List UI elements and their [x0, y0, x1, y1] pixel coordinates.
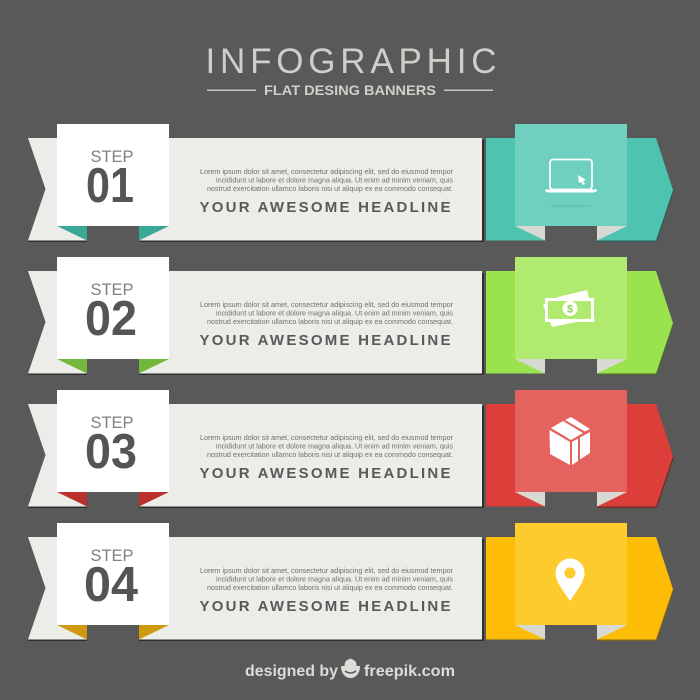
body text: nostrud exercitation ullamco laboris nisi ut aliquip ex ea commodo consequat.	[207, 184, 453, 193]
left fold tabs	[57, 226, 169, 240]
body text: Lorem ipsum dolor sit amet, consectetur adipiscing elit, sed do eiusmod tempor	[200, 300, 454, 309]
step card	[57, 257, 169, 359]
step number: 04	[84, 558, 138, 612]
body text: Lorem ipsum dolor sit amet, consectetur adipiscing elit, sed do eiusmod tempor	[200, 433, 454, 442]
body text	[200, 433, 454, 459]
body text: Lorem ipsum dolor sit amet, consectetur adipiscing elit, sed do eiusmod tempor	[200, 566, 454, 575]
right fold tabs	[515, 492, 627, 506]
panel: step 1	[28, 124, 674, 243]
footer credit: designed by	[245, 663, 338, 680]
icon: freepik mascot	[341, 658, 360, 678]
icon: banknotes: $	[567, 304, 573, 316]
icon: map pin	[556, 558, 584, 601]
right ribbon	[486, 537, 674, 642]
subtitle: FLAT DESING BANNERS	[264, 82, 436, 98]
icon card	[515, 257, 627, 359]
step label: STEP	[90, 148, 134, 166]
body text	[200, 167, 454, 193]
body text: nostrud exercitation ullamco laboris nisi ut aliquip ex ea commodo consequat.	[207, 317, 453, 326]
body text: incididunt ut labore et dolore magna aliqua. Ut enim ad minim veniam, quis	[216, 176, 453, 184]
icon card	[515, 390, 627, 492]
icon: banknotes	[543, 290, 595, 327]
body text: Lorem ipsum dolor sit amet, consectetur adipiscing elit, sed do eiusmod tempor	[200, 167, 454, 176]
headline: YOUR AWESOME HEADLINE	[200, 332, 450, 349]
body text	[200, 300, 454, 326]
step card	[57, 523, 169, 625]
body text: incididunt ut labore et dolore magna aliqua. Ut enim ad minim veniam, quis	[216, 574, 453, 584]
step number: 01	[86, 159, 134, 213]
right fold tabs	[515, 359, 627, 374]
headline: YOUR AWESOME HEADLINE	[200, 465, 450, 482]
step label: STEP	[90, 281, 134, 299]
panel: step 4	[28, 523, 674, 642]
icon card	[515, 124, 627, 226]
right fold tabs	[515, 226, 627, 240]
left fold tabs	[57, 492, 169, 506]
right ribbon	[486, 404, 674, 509]
step card	[57, 390, 169, 492]
step label: STEP	[90, 414, 134, 432]
step label: STEP	[90, 547, 134, 565]
right ribbon	[486, 271, 674, 376]
body text: incididunt ut labore et dolore magna aliqua. Ut enim ad minim veniam, quis	[216, 442, 453, 450]
left ribbon	[28, 537, 484, 642]
step number: 03	[85, 425, 137, 479]
footer credit	[245, 658, 455, 680]
left ribbon	[28, 404, 484, 509]
headline: YOUR AWESOME HEADLINE	[200, 598, 450, 615]
left ribbon	[28, 138, 484, 243]
left ribbon	[28, 271, 484, 376]
step number: 02	[85, 292, 137, 346]
body text: nostrud exercitation ullamco laboris nisi ut aliquip ex ea commodo consequat.	[207, 450, 453, 459]
body text: incididunt ut labore et dolore magna aliqua. Ut enim ad minim veniam, quis	[216, 308, 453, 318]
icon: laptop	[545, 160, 597, 208]
body text	[200, 566, 454, 592]
headline: YOUR AWESOME HEADLINE	[200, 199, 450, 216]
right fold tabs	[515, 625, 627, 640]
body text: nostrud exercitation ullamco laboris nisi ut aliquip ex ea commodo consequat.	[207, 583, 453, 592]
panel: step 3	[28, 390, 674, 509]
left fold tabs	[57, 625, 169, 640]
footer credit: freepik.com	[364, 663, 455, 680]
panel: step 2	[28, 257, 674, 376]
icon card	[515, 523, 627, 625]
left fold tabs	[57, 359, 169, 374]
title: INFOGRAPHIC	[206, 42, 496, 81]
step card	[57, 124, 169, 226]
icon: box	[550, 417, 590, 465]
right ribbon	[486, 138, 674, 243]
